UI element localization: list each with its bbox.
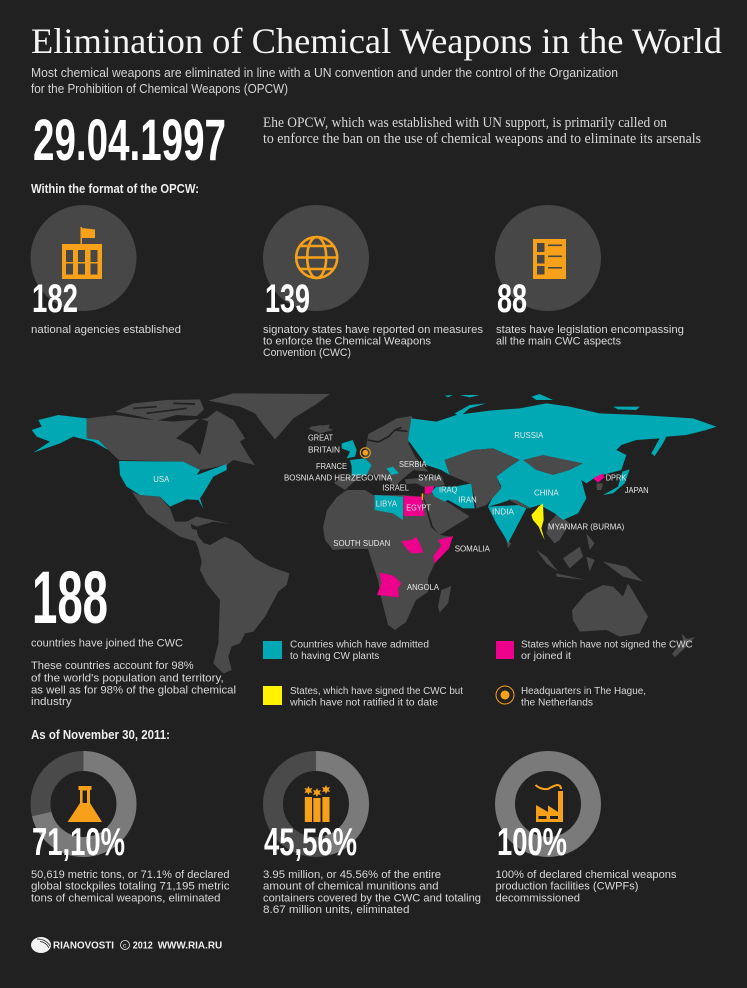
stat: production facilities 100%: decommissioned [496, 892, 580, 904]
map: teal countries [375, 394, 716, 543]
stat: production facilities 100%: 100% [497, 821, 567, 864]
legend: magenta: or joined it [521, 651, 571, 662]
map: Asia and Oceania (gray land) [405, 476, 688, 640]
stat: 188 countries: These countries account for 98% [31, 660, 194, 672]
map: USA [32, 415, 227, 508]
stat: national agencies [30, 205, 181, 336]
subtitle [31, 65, 618, 96]
stat: legislation: all the main CWC aspects [496, 336, 621, 348]
legend: teal: Countries which have admitted [290, 639, 429, 650]
map: country labels: IRAQ [439, 485, 458, 495]
legend: yellow: which have not ratified it to date [289, 698, 438, 709]
stat: munitions 45.56%: containers covered by the CWC and totaling [263, 892, 481, 904]
date description: Ehe OPCW, which was established with UN support, is primarily called on [263, 115, 668, 131]
icon: flask [68, 786, 102, 822]
legend: headquarters: Headquarters in The Hague, [521, 686, 646, 697]
stat: stockpiles 71.10%: 50,619 metric tons, or 71.1% of declared [31, 869, 229, 881]
map: South America [190, 528, 289, 673]
icon: RIA Novosti globe [31, 937, 51, 953]
map: gray overlays for Central Asia, Mongolia, Korea [445, 448, 603, 508]
stat: legislation: states have legislation encompassing [496, 324, 684, 336]
stat: legislation [495, 205, 684, 348]
stat: production facilities 100%: production facilities (CWPFs) [496, 881, 638, 893]
stat: 188 countries: industry [31, 696, 72, 708]
footer logo and credit: 2012 [133, 940, 153, 952]
map: country labels: USA [153, 474, 170, 484]
stat: 188 countries: of the world's population and territory, [31, 673, 224, 685]
map: country labels: BRITAIN [308, 445, 340, 455]
map: country labels: INDIA [492, 507, 514, 517]
stat: national agencies: 182 [32, 277, 78, 321]
map: magenta countries [377, 473, 605, 597]
stat: signatory states: signatory states have reported on measures [263, 324, 484, 336]
map: country labels: IRAN [458, 495, 477, 505]
legend: headquarters [496, 686, 646, 709]
footer logo and credit [31, 937, 222, 953]
legend: teal: to having CW plants [290, 651, 379, 662]
map: country labels [153, 430, 649, 592]
icon: checklist document [533, 239, 566, 279]
map: country labels: CHINA [534, 488, 559, 498]
stat: stockpiles 71.10% [31, 761, 230, 904]
world map [32, 393, 716, 673]
donut chart: 71.1% [40, 761, 126, 847]
subtitle: for the Prohibition of Chemical Weapons (OPCW) [31, 81, 288, 96]
map: country labels: SERBIA [399, 459, 427, 469]
legend: yellow [263, 686, 463, 709]
stat: signatory states: Convention (CWC) [263, 347, 351, 359]
stat: national agencies: national agencies established [31, 324, 181, 336]
map: Americas (gray land) [87, 393, 333, 543]
legend: magenta: States which have not signed the CWC [521, 639, 693, 650]
map: headquarters marker [360, 448, 370, 458]
legend: headquarters: the Netherlands [521, 698, 593, 709]
legend: yellow: States, which have signed the CWC but [290, 686, 463, 697]
stat: legislation: 88 [497, 277, 527, 321]
stat: 188 countries: as well as for 98% of the global chemical [31, 684, 236, 696]
icon: building with flag [62, 227, 102, 279]
heading: as of date: As of November 30, 2011: [31, 728, 170, 742]
map: country labels: EGYPT [406, 503, 431, 513]
stat: stockpiles 71.10%: global stockpiles totaling 71,195 metric [31, 881, 230, 893]
footer logo and credit: WWW.RIA.RU [158, 940, 222, 952]
stat: munitions 45.56%: 3.95 million, or 45.56% of the entire [263, 869, 441, 881]
map: Britain and France [342, 440, 372, 476]
map: country labels: FRANCE [316, 461, 347, 471]
title: Elimination of Chemical Weapons in the World [31, 21, 722, 61]
stat: signatory states [263, 205, 484, 359]
legend: magenta [496, 639, 693, 662]
map: country labels: SOUTH SUDAN [333, 538, 390, 548]
stat: stockpiles 71.10%: 71,10% [32, 821, 125, 864]
footer logo and credit: c [123, 942, 127, 950]
map: country labels: SOMALIA [455, 544, 490, 554]
icon: munitions [304, 785, 330, 822]
map: country labels: LIBYA [376, 498, 397, 508]
heading: within the format: Within the format of the OPCW: [31, 182, 199, 196]
map: yellow countries (Myanmar, Israel) [422, 493, 545, 540]
map: Europe [310, 416, 428, 490]
donut chart: 100% [505, 761, 591, 847]
map: country labels: SYRIA [418, 473, 442, 483]
stat: 188 countries [31, 556, 236, 708]
donut chart: 45.56% [273, 761, 359, 847]
map: country labels: BOSNIA AND HERZEGOVINA [284, 473, 392, 483]
map: Africa [323, 490, 453, 630]
map: New Zealand [672, 637, 695, 657]
icon: globe [296, 237, 337, 278]
legend [263, 639, 693, 709]
map: country labels: GREAT [308, 433, 333, 443]
legend: teal [263, 639, 429, 662]
stat: production facilities 100%: 100% of declared chemical weapons [496, 869, 677, 881]
footer logo and credit: RIANOVOSTI [53, 940, 114, 952]
map: country labels: MYANMAR (BURMA) [548, 522, 624, 532]
stat: 188 countries: countries have joined the CWC [31, 638, 183, 650]
stat: munitions 45.56%: 45,56% [264, 821, 357, 864]
stat: production facilities 100% [496, 761, 677, 904]
date description: to enforce the ban on the use of chemical weapons and to eliminate its arsenals [263, 131, 701, 147]
stat: 188 countries: 188 [32, 556, 108, 639]
map: country labels: ANGOLA [407, 582, 439, 592]
map: country labels: DPRK [606, 473, 627, 483]
date description [263, 115, 701, 147]
stat: munitions 45.56%: 8.67 million units, eliminated [263, 904, 410, 916]
stat: munitions 45.56%: amount of chemical munitions and [263, 881, 439, 893]
stat: signatory states: to enforce the Chemical Weapons [263, 336, 432, 348]
icon: factory [536, 785, 563, 822]
stat: signatory states: 139 [265, 277, 310, 321]
map: country labels: JAPAN [625, 485, 649, 495]
map: country labels: RUSSIA [514, 430, 544, 440]
subtitle: Most chemical weapons are eliminated in line with a UN convention and under the control of the Organization [31, 65, 618, 80]
stat: stockpiles 71.10%: tons of chemical weapons, eliminated [31, 892, 220, 904]
stat: munitions 45.56% [263, 761, 481, 916]
date: 29.04.1997 [33, 108, 226, 173]
map: country labels: ISRAEL [382, 483, 409, 493]
